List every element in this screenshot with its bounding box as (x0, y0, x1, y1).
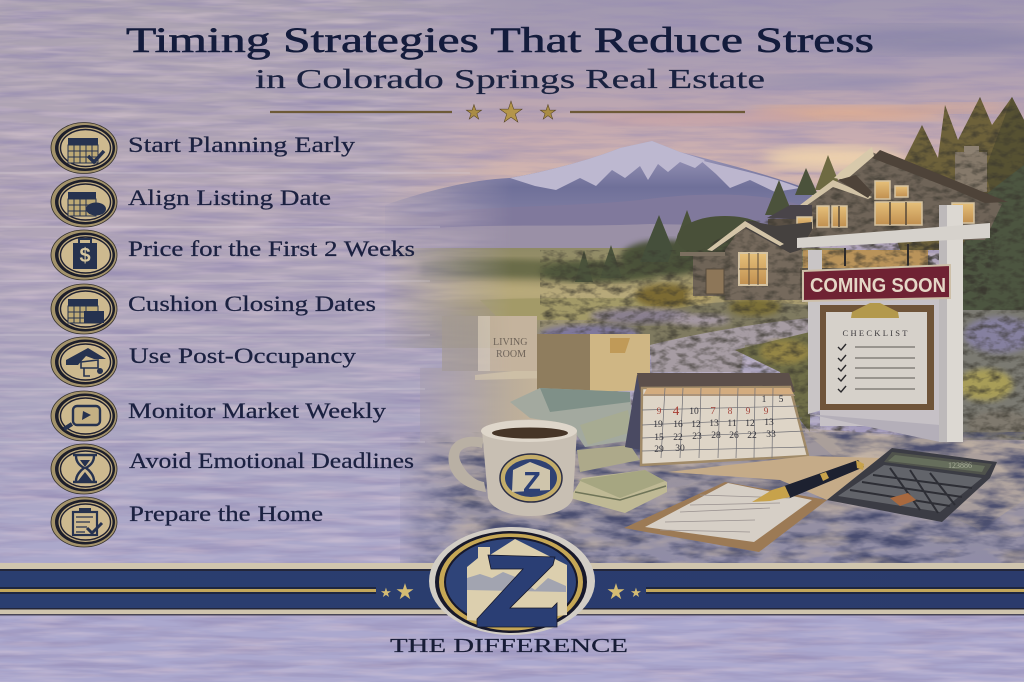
icon: price tag (51, 230, 117, 280)
icon: clipboard check (51, 497, 117, 547)
subtitle: in Colorado Springs Real Estate (255, 64, 765, 94)
bottom banner (0, 563, 1024, 616)
tan box (537, 334, 650, 392)
item: cushion closing dates (51, 284, 376, 334)
icon: calendar cushion (51, 284, 117, 334)
title divider with stars: ★ (498, 97, 524, 129)
item: align listing date (51, 177, 331, 227)
stars right (606, 579, 642, 604)
mug logo: Z (523, 467, 541, 499)
logo letter (477, 555, 557, 627)
item: align listing date: Align Listing Date (128, 185, 331, 210)
mountain (385, 141, 830, 250)
calendar numbers: 23 (692, 432, 702, 442)
item: price for the first 2 weeks (51, 230, 415, 280)
stars left (380, 579, 415, 604)
tagline: THE DIFFERENCE (390, 636, 628, 657)
checklist board: CHECKLIST (842, 328, 908, 338)
sign post (808, 250, 822, 414)
title divider with stars: ★ (539, 102, 557, 124)
item: cushion closing dates: Cushion Closing Dates (128, 291, 376, 316)
item: monitor market weekly (51, 391, 386, 441)
coffee mug (448, 420, 577, 516)
icon: hourglass (51, 444, 117, 494)
item: prepare the home: Prepare the Home (129, 501, 323, 526)
logo emblem (429, 527, 595, 635)
calendar numbers: 9 (657, 407, 662, 417)
item: price for the first 2 weeks: Price for the First 2 Weeks (128, 236, 415, 261)
calendar numbers: 16 (673, 420, 683, 430)
icon: calendar clock (51, 177, 117, 227)
calculator: 123886 (948, 461, 972, 470)
large pine trees (880, 97, 1024, 310)
stars left: ★ (380, 585, 392, 600)
calendar numbers (653, 395, 784, 455)
calendar numbers: 9 (746, 407, 751, 417)
calendar numbers: 19 (653, 420, 663, 430)
desk calendar (625, 373, 808, 465)
meadow (385, 248, 845, 348)
calendar numbers: 9 (764, 407, 769, 417)
rock table surface (400, 428, 1024, 563)
calendar numbers: 5 (779, 395, 784, 405)
calendar numbers: 8 (728, 407, 733, 417)
calendar numbers: 12 (745, 419, 755, 429)
calendar numbers: 13 (709, 419, 719, 429)
calendar numbers: 7 (710, 405, 716, 417)
calendar numbers: 28 (711, 431, 721, 441)
strategy list (0, 122, 470, 547)
icon: price tag: $ (79, 245, 91, 267)
calendar numbers: 15 (654, 433, 664, 443)
icon: calendar check (51, 122, 117, 174)
stars right: ★ (630, 585, 642, 600)
coming soon panel: COMING SOON (810, 275, 946, 297)
calendar numbers: 22 (747, 431, 757, 441)
title divider with stars: ★ (465, 102, 483, 124)
title divider with stars (270, 97, 745, 129)
real estate signpost (797, 205, 990, 442)
house (680, 146, 1008, 301)
icon: magnifier monitor (51, 391, 117, 441)
living room box (442, 316, 537, 371)
landscape illustration (360, 0, 1024, 450)
icon: house with keys (51, 337, 117, 387)
item: start planning early: Start Planning Early (128, 132, 355, 157)
sunset sky (410, 0, 1024, 196)
flowering shrubs (540, 282, 808, 345)
calendar numbers: 4 (673, 403, 680, 418)
gravel path (650, 318, 812, 372)
logo mountains (467, 572, 566, 592)
calendar numbers: 10 (689, 407, 699, 417)
tree line (540, 155, 842, 282)
clipboard with paper and pen (624, 456, 880, 552)
logo house (467, 539, 567, 622)
calendar numbers: 29 (654, 445, 664, 455)
item: avoid emotional deadlines (51, 444, 414, 494)
calendar numbers: 11 (727, 419, 737, 429)
flower beds (735, 310, 1024, 440)
calculator (827, 448, 997, 522)
calendar numbers: 12 (691, 420, 701, 430)
stars right: ★ (606, 579, 626, 604)
calendar numbers: 26 (729, 431, 739, 441)
cash bundles (510, 388, 667, 513)
calendar numbers: 30 (675, 444, 685, 454)
moving boxes (420, 316, 650, 442)
checklist board (820, 303, 934, 410)
item: avoid emotional deadlines: Avoid Emotional Deadlines (129, 448, 414, 473)
living room box: LIVING (493, 337, 527, 348)
item: use post-occupancy: Use Post-Occupancy (129, 343, 356, 368)
calendar numbers: 33 (766, 430, 776, 440)
item: use post-occupancy (51, 337, 356, 387)
calendar numbers: 1 (762, 395, 767, 405)
calendar numbers: 13 (764, 418, 774, 428)
item: monitor market weekly: Monitor Market Weekly (128, 398, 386, 423)
item: prepare the home (51, 497, 323, 547)
lit windows (797, 181, 974, 228)
stars left: ★ (395, 579, 415, 604)
living room box: ROOM (496, 349, 526, 360)
calendar numbers: 22 (673, 433, 683, 443)
item: start planning early (51, 122, 355, 174)
pen (752, 460, 864, 502)
coming soon panel (803, 265, 950, 301)
title: Timing Strategies That Reduce Stress (126, 20, 874, 60)
lower box (420, 368, 541, 442)
